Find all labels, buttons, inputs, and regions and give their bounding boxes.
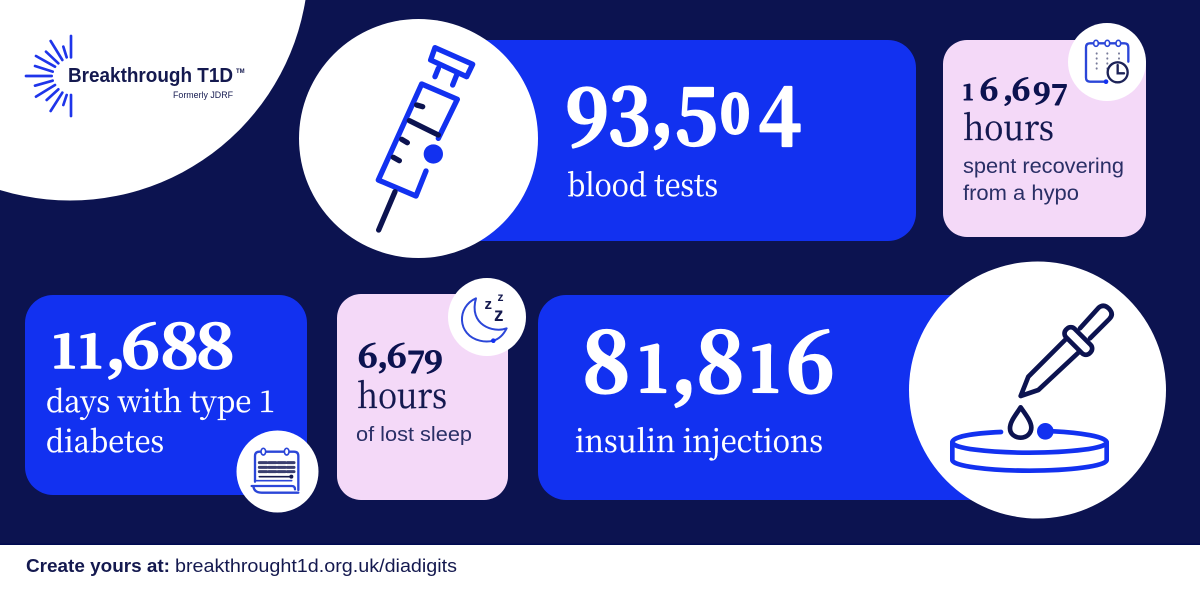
- stat: 11,688: 1: [79, 315, 102, 381]
- logo subtitle: Formerly JDRF: [173, 90, 233, 100]
- stat: 16,697: 7: [1051, 74, 1068, 114]
- stat: 11,688: 8: [160, 300, 199, 386]
- panel: days with type 1 diabetes: [25, 295, 318, 512]
- label: days with type 1 diabetes: days with type 1: [46, 377, 275, 421]
- logo panel: white corner circle with logo: [0, 0, 308, 200]
- stat: 81,816: 6: [786, 299, 835, 416]
- stat: 6,679: 6: [358, 331, 378, 377]
- zzz letters: z: [498, 290, 504, 304]
- stat: 16,697: 9: [1033, 73, 1051, 113]
- stat: 6,679: ,: [377, 331, 388, 377]
- stat: 93,504: ,: [650, 48, 674, 158]
- stat: 93,504: 9: [565, 59, 609, 169]
- unit: hours: hours: [357, 369, 447, 419]
- stat: 16,697: 1: [963, 77, 973, 107]
- panel: hours recovering from a hypo: [943, 23, 1146, 237]
- label: of lost sleep: of lost sleep: [356, 424, 472, 446]
- panel: hours of lost sleep: [337, 278, 526, 500]
- stat: 11,688: 8: [196, 300, 235, 386]
- stat: 6,679: 6: [387, 331, 407, 377]
- icon: calendar with clock: [1068, 23, 1146, 101]
- footer bar: [0, 544, 1200, 616]
- zzz letters: z: [494, 305, 504, 326]
- stat: 16,697: 6: [1012, 66, 1030, 109]
- label: insulin injections: insulin injections: [575, 416, 823, 461]
- zzz letters: z: [484, 296, 492, 313]
- stat: 16,697: 6: [980, 66, 998, 109]
- label: blood tests: blood tests: [567, 160, 718, 205]
- icon: logo sunburst: [26, 36, 71, 116]
- unit: hours: hours: [963, 101, 1054, 151]
- panel: insulin injections: [538, 295, 1038, 500]
- label: days with type 1 diabetes: diabetes: [46, 417, 164, 461]
- stat: 6,679: 9: [424, 339, 443, 382]
- logo trademark: TM: [236, 69, 245, 75]
- stat: 93,504: 5: [675, 58, 718, 168]
- stat: 93,504: 4: [758, 58, 801, 168]
- stat: 81,816: 1: [750, 320, 779, 411]
- icon: dropper and petri dish in white circle: [909, 262, 1166, 518]
- stat: 11,688: ,: [105, 300, 127, 386]
- label: spent recovering from a hypo: from a hypo: [963, 182, 1079, 205]
- stat: 6,679: 7: [407, 339, 426, 382]
- footer call to action: breakthrought1d.org.uk/diadigits: [175, 556, 457, 576]
- stat: 16,697: ,: [1003, 66, 1013, 109]
- stat: 81,816: 8: [582, 299, 631, 416]
- stat: 81,816: 1: [638, 320, 667, 411]
- icon: syringe in white circle: [299, 19, 538, 258]
- logo wordmark: Breakthrough T1D: [68, 65, 233, 87]
- icon: calendar: [236, 430, 318, 512]
- panel: blood tests: [418, 40, 916, 241]
- stat: 93,504: 0: [721, 75, 749, 146]
- icon: moon and zzz: [448, 278, 526, 356]
- stat: 81,816: 8: [696, 299, 745, 416]
- stat: 93,504: 3: [608, 58, 651, 168]
- stat: 11,688: 6: [121, 300, 160, 386]
- footer call to action: Create yours at:: [26, 556, 170, 576]
- label: spent recovering from a hypo: spent recovering: [963, 155, 1124, 178]
- stat: 11,688: 1: [52, 315, 76, 381]
- stat: 81,816: ,: [670, 299, 697, 416]
